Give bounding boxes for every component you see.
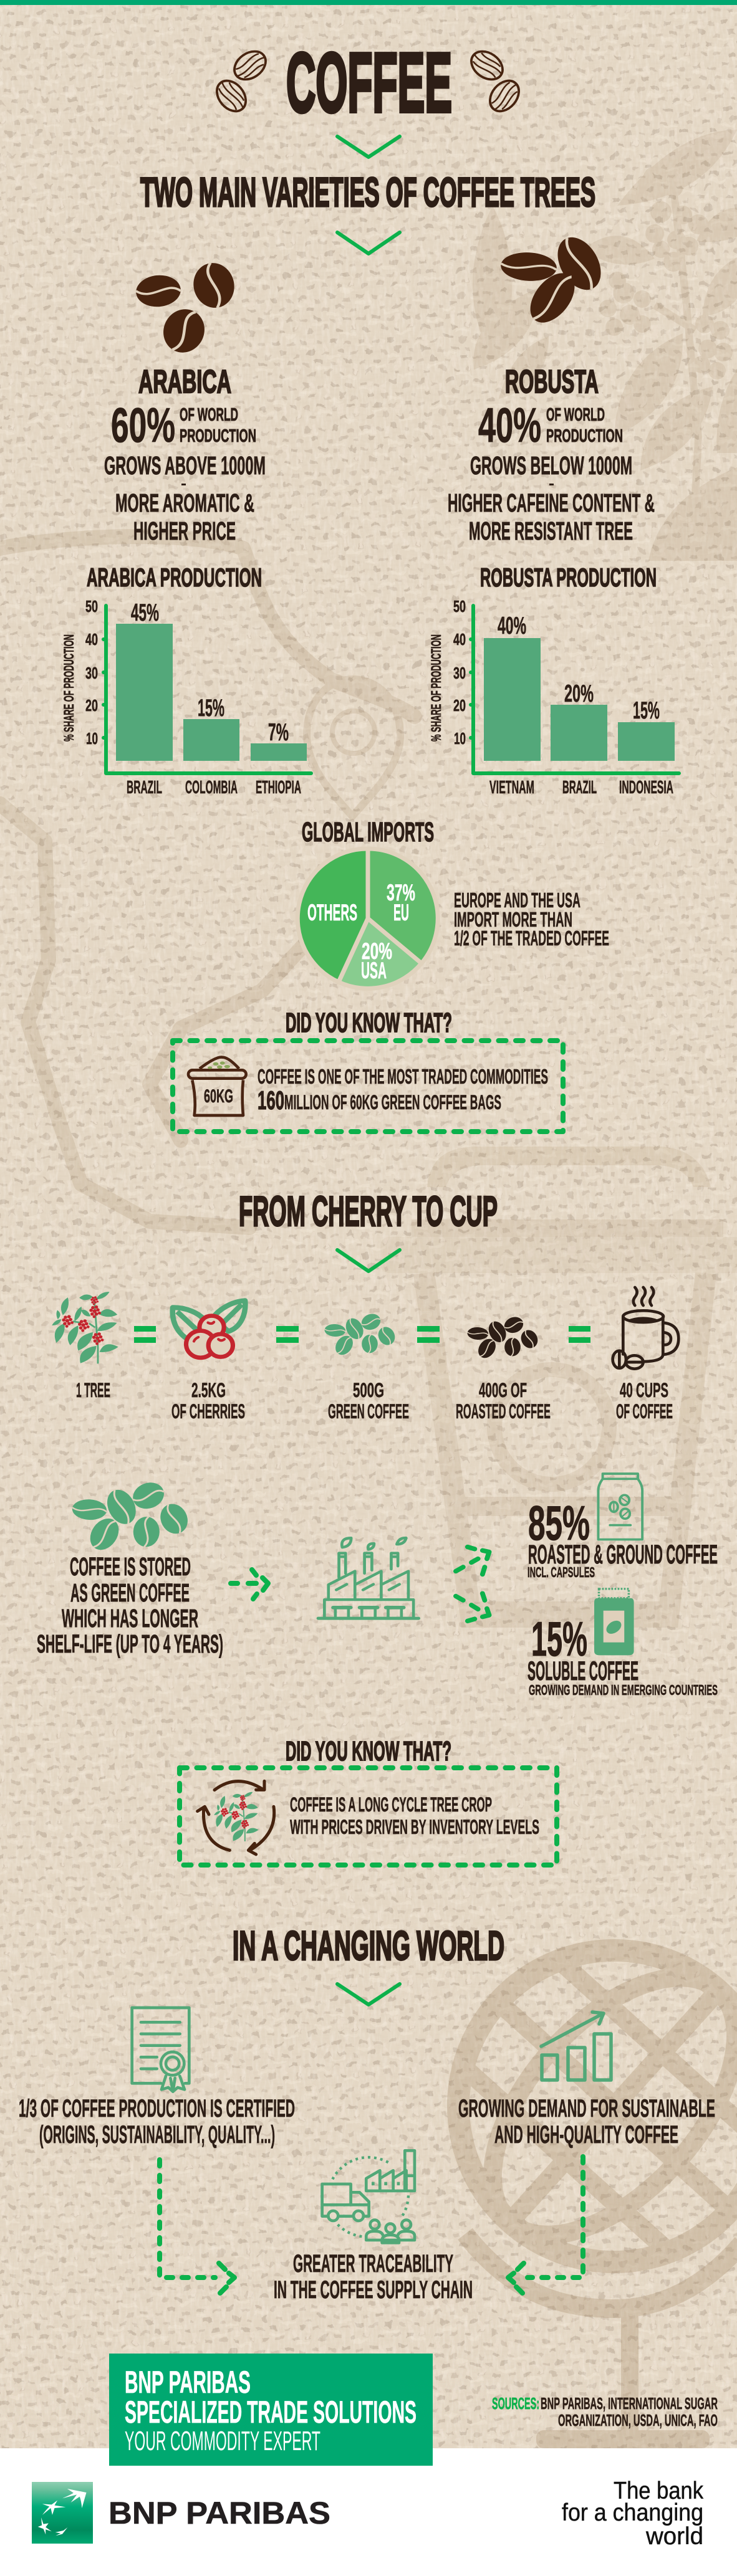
icon: robusta beans [500, 230, 610, 331]
icon: supply chain [322, 2150, 415, 2243]
tagline: the bank for a changing world: for a changing [562, 2499, 703, 2526]
name: ROBUSTA [505, 364, 599, 400]
y axis labels: 10 [454, 729, 466, 748]
description [448, 451, 655, 545]
arrow: to factory [231, 1570, 268, 1599]
icon: outlined beans right [466, 45, 525, 117]
panel: robusta [448, 230, 655, 545]
description: GROWS ABOVE 1000M [104, 451, 266, 480]
description: HIGHER PRICE [133, 517, 236, 545]
chevron [337, 232, 400, 254]
pie labels: 37% [387, 880, 415, 905]
watermark: coffee branch [473, 130, 737, 561]
bar values [498, 613, 660, 724]
title [211, 36, 525, 130]
pie caption [454, 889, 609, 950]
storage text: WHICH HAS LONGER [62, 1604, 198, 1633]
share caption: OF WORLD [180, 405, 238, 425]
fact text [258, 1065, 548, 1115]
heading: GLOBAL IMPORTS [302, 817, 434, 847]
fact text: 160 [258, 1085, 284, 1115]
country labels: ETHIOPIA [256, 778, 301, 798]
watermark: takeaway cup [380, 1147, 737, 1619]
bar values: 15% [198, 695, 224, 722]
certified text [19, 2095, 295, 2149]
share caption: PRODUCTION [546, 426, 623, 446]
y axis labels: 30 [85, 664, 98, 682]
labels: ROASTED COFFEE [456, 1400, 551, 1423]
share caption [180, 405, 256, 446]
tagline: the bank for a changing world: world [645, 2523, 703, 2550]
logo mark [32, 2482, 93, 2544]
icon: outlined beans left [211, 45, 271, 117]
labels: GREEN COFFEE [328, 1400, 409, 1423]
logo wordmark: BNP PARIBAS [108, 2496, 330, 2531]
tagline: the bank for a changing world [562, 2478, 703, 2550]
panel: specialized trade solutions [109, 2354, 433, 2466]
axes [471, 606, 679, 773]
bar values [131, 599, 289, 746]
share 60 percent: 60% [111, 398, 175, 452]
icon: 60kg bag: 60KG [204, 1086, 233, 1107]
panel: arabica [104, 259, 266, 545]
panel: roasted and ground [527, 1474, 718, 1580]
y axis labels [85, 597, 98, 748]
country labels [489, 778, 673, 798]
bar values: 40% [498, 613, 526, 639]
icon: roasted coffee [467, 1314, 541, 1362]
storage text: AS GREEN COFFEE [70, 1578, 190, 1607]
icon: green beans [72, 1478, 193, 1555]
share 40 percent: 40% [478, 398, 541, 452]
share caption: PRODUCTION [180, 426, 256, 446]
panel: traceability [274, 2150, 473, 2304]
description: MORE AROMATIC & [115, 489, 254, 517]
chevron [337, 1250, 400, 1271]
fact text: MILLION OF 60KG GREEN COFFEE BAGS [284, 1091, 501, 1114]
certified text: (ORIGINS, SUSTAINABILITY, QUALITY...) [39, 2121, 275, 2149]
chevron [337, 1984, 400, 2005]
dashed frame [180, 1768, 557, 1865]
icon: factory [318, 1538, 418, 1618]
pie caption: IMPORT MORE THAN [454, 908, 572, 931]
dashed frame [173, 1041, 563, 1132]
icon: certificate [132, 2008, 189, 2092]
labels: 400G OF [479, 1379, 527, 1401]
traceability text: IN THE COFFEE SUPPLY CHAIN [274, 2276, 473, 2304]
share 15 percent: 15% [531, 1611, 587, 1666]
labels: 1 TREE [76, 1379, 110, 1401]
logo: BNP Paribas [32, 2482, 330, 2544]
footer background [0, 2448, 737, 2576]
equivalence row [52, 1287, 678, 1423]
icon: crop cycle [198, 1781, 274, 1854]
storage text [37, 1552, 223, 1658]
bar values: 15% [633, 697, 660, 724]
name: ARABICA [138, 364, 231, 400]
bar chart: robusta production [428, 563, 679, 798]
storage text: SHELF-LIFE (UP TO 4 YEARS) [37, 1629, 223, 1658]
bars [116, 624, 307, 761]
watermark: globe [394, 1886, 737, 2448]
icon: coffee bag [598, 1474, 642, 1540]
arrow: right dashed [527, 2157, 583, 2278]
traceability text: GREATER TRACEABILITY [293, 2250, 453, 2278]
solutions line: SPECIALIZED TRADE SOLUTIONS [125, 2395, 417, 2430]
pie labels [307, 880, 415, 983]
y axis title: % SHARE OF PRODUCTION [428, 634, 444, 742]
storage text: COFFEE IS STORED [70, 1552, 191, 1581]
country labels: BRAZIL [127, 778, 162, 798]
y axis labels: 40 [85, 630, 98, 649]
arrow: left dashed [160, 2160, 215, 2278]
sources: SOURCES: [492, 2394, 539, 2413]
title: COFFEE [286, 36, 452, 130]
heading: DID YOU KNOW THAT? [286, 1736, 451, 1767]
pie caption: EUROPE AND THE USA [454, 889, 580, 912]
bar values: 20% [564, 680, 594, 707]
traceability text [274, 2250, 473, 2304]
heading: from cherry to cup: FROM CHERRY TO CUP [239, 1188, 498, 1235]
equivalence row: OF COFFEE [616, 1400, 673, 1423]
icon: green coffee [324, 1311, 398, 1358]
icon: growth chart [541, 2012, 611, 2080]
pie labels: 20% [362, 938, 392, 964]
top bar [0, 0, 737, 5]
y axis labels: 50 [453, 597, 466, 616]
labels: 2.5KG [191, 1379, 226, 1401]
equals [276, 1326, 299, 1343]
y axis labels [453, 597, 466, 748]
share caption [546, 405, 623, 446]
labels: 500G [353, 1379, 384, 1401]
icon: arabica beans [135, 259, 239, 360]
brand line: BNP PARIBAS [125, 2365, 251, 2400]
pie chart [297, 849, 438, 988]
fact text: WITH PRICES DRIVEN BY INVENTORY LEVELS [290, 1816, 539, 1838]
heading: in a changing world: IN A CHANGING WORLD [233, 1922, 504, 1968]
country labels: INDONESIA [619, 778, 673, 798]
bar chart: arabica production [61, 563, 311, 798]
pie labels: OTHERS [307, 900, 357, 925]
arrows: split to products [456, 1547, 489, 1621]
fact text: COFFEE IS A LONG CYCLE TREE CROP [290, 1793, 492, 1816]
callout: did you know 1 [173, 1008, 563, 1132]
equals [417, 1326, 440, 1343]
arrowhead right [508, 2263, 524, 2293]
y axis labels: 30 [453, 664, 466, 682]
share caption: OF WORLD [546, 405, 605, 425]
pie labels: USA [361, 958, 387, 983]
equals [569, 1326, 590, 1343]
y axis title: % SHARE OF PRODUCTION [61, 634, 77, 742]
chevron [337, 136, 400, 157]
icon: coffee cup [613, 1287, 678, 1369]
certified text: 1/3 OF COFFEE PRODUCTION IS CERTIFIED [19, 2095, 295, 2122]
chart title: ARABICA PRODUCTION [87, 563, 262, 592]
pie caption: 1/2 OF THE TRADED COFFEE [454, 927, 609, 950]
axes [104, 606, 311, 773]
callout: did you know 2 [180, 1736, 557, 1865]
bar values: 45% [131, 599, 159, 626]
watermark: South America map and pin [0, 537, 415, 1228]
y axis labels: 40 [453, 630, 466, 649]
icon: coffee jar [594, 1589, 634, 1655]
equals [134, 1326, 156, 1343]
tagline: YOUR COMMODITY EXPERT [125, 2426, 320, 2456]
panel: certified [19, 2008, 295, 2149]
panel: growing demand [458, 2012, 715, 2149]
country labels [127, 778, 301, 798]
country labels: BRAZIL [562, 778, 597, 798]
icon: tree [52, 1292, 118, 1363]
labels: OF CHERRIES [171, 1400, 245, 1423]
icon: 60kg bag [188, 1057, 246, 1115]
icon: cherries [173, 1300, 245, 1358]
tagline: the bank for a changing world: The bank [614, 2478, 703, 2504]
demand text [458, 2095, 715, 2149]
global imports [297, 817, 609, 988]
pie labels: EU [393, 900, 409, 925]
share 85 percent: 85% [528, 1496, 590, 1550]
y axis labels: 20 [453, 696, 466, 715]
note: INCL. CAPSULES [527, 1564, 595, 1580]
y axis labels: 20 [85, 696, 98, 715]
country labels: VIETNAM [489, 778, 534, 798]
arrowhead left [219, 2263, 234, 2293]
fact text [290, 1793, 539, 1838]
panel: soluble [527, 1589, 718, 1698]
bars [484, 638, 675, 761]
country labels: COLOMBIA [185, 778, 238, 798]
labels [76, 1379, 673, 1423]
labels: 40 CUPS [620, 1379, 668, 1401]
y axis labels: 50 [85, 597, 98, 616]
y axis labels: 10 [86, 729, 98, 748]
description [104, 451, 266, 545]
panel: storage [37, 1478, 223, 1658]
sources [492, 2394, 718, 2430]
bar values: 7% [268, 719, 289, 746]
heading: DID YOU KNOW THAT? [286, 1008, 452, 1038]
